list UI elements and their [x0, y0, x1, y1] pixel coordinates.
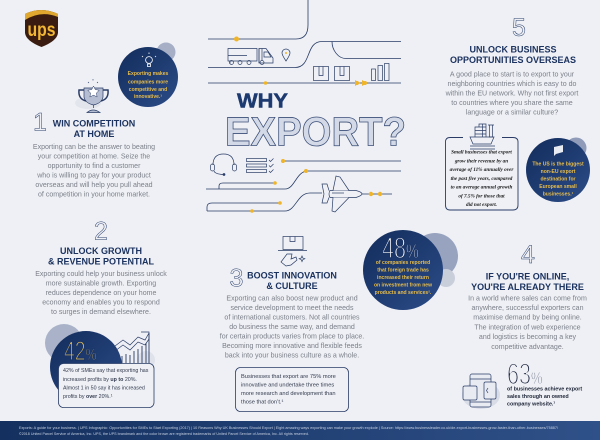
section 2: unlock growth and revenue potential: to surges in demand elsewhere.	[51, 309, 151, 316]
text box	[58, 364, 154, 408]
section 2: unlock growth and revenue potential: 2	[94, 218, 108, 246]
icon: devices	[462, 374, 500, 409]
section 3: boost innovation and culture: 3	[230, 264, 243, 292]
callout circle: competitive and innovative: companies more	[128, 80, 168, 86]
icon: truck	[228, 48, 273, 64]
footer	[0, 421, 600, 440]
icon: boxes	[314, 66, 350, 80]
section 5: unlock business opportunities overseas: to countries where you share the same	[451, 100, 573, 107]
icon: checklist	[246, 158, 274, 172]
section 3: boost innovation and culture: for certain products varies from place to place.	[220, 334, 364, 340]
section 4: if you're online: YOU'RE ALREADY THERE	[471, 282, 584, 292]
icon: bar chart	[372, 64, 389, 80]
callout box: small businesses growth: did not export.	[466, 202, 497, 208]
footer: Exports: A guide for your business. | UPS Infographic: Opportunities for SMEs to Start Exporting (2017) | 10 Reasons Why UK Businesses Should Export | Eight amazing ways exporting can make your growth explode | Source: https://www.businessleader.co.uk/de-export-businesses-grow-faster-than-other-businesses/75887/	[19, 426, 558, 430]
callout circle: competitive and innovative	[118, 42, 178, 107]
icon: trophy	[75, 79, 108, 112]
icon: flag	[554, 145, 563, 156]
illustration: upper route lines, truck, boxes	[208, 0, 401, 86]
section 1: win competition at home: 1	[33, 108, 47, 136]
callout circle: US biggest destination: The US is the biggest	[532, 162, 584, 168]
icon: container ship	[470, 124, 495, 149]
section 2: unlock growth and revenue potential	[35, 218, 167, 316]
section 4: if you're online: In a world where sales can come from	[468, 296, 587, 302]
logo: UPS shield	[25, 10, 58, 47]
callout circle: US biggest destination: non-EU export	[541, 169, 576, 175]
section 4: if you're online: competitive advantage.	[491, 344, 564, 351]
callout box: small businesses growth: the past five years, compared	[451, 176, 513, 182]
section 5: unlock business opportunities overseas: A good place to start is to export to your	[450, 72, 575, 78]
callout circle: competitive and innovative: innovative.¹	[134, 94, 162, 100]
section 5: unlock business opportunities overseas: UNLOCK BUSINESS	[469, 44, 557, 54]
stat: 48%: 48%	[382, 230, 419, 265]
callout circle: US biggest destination	[526, 138, 590, 202]
callout: 42 percent	[45, 324, 155, 408]
section 4: if you're online: anywhere, successful exporters can	[471, 305, 584, 312]
callout box: small businesses growth: Small businesses that export	[451, 150, 512, 156]
section 3: boost innovation and culture: of international customers. Not all countries	[224, 314, 360, 322]
icon: headset	[210, 154, 236, 176]
callout box: small businesses growth: of 7.5% for those that	[458, 194, 505, 200]
title	[225, 90, 406, 154]
section 2: unlock growth and revenue potential: & REVENUE POTENTIAL	[48, 256, 155, 266]
section 3: boost innovation and culture: do business the same way, and demand	[229, 324, 355, 331]
chart: rising arrows	[115, 332, 149, 363]
callout box: small businesses growth: to an average annual growth	[451, 184, 512, 190]
section 2: unlock growth and revenue potential: UNLOCK GROWTH	[60, 246, 142, 256]
section 3: boost innovation and culture: back into your business culture as a whole.	[225, 352, 359, 360]
section 1: win competition at home: your competition at home. Seize the	[38, 154, 150, 160]
section 5: unlock business opportunities overseas: neighboring countries which is easy to do	[448, 81, 577, 88]
callout circle: 48 percent: on investment from new	[374, 282, 432, 288]
stat: 63 percent	[507, 356, 582, 408]
callout circle: US biggest destination: destination for	[540, 176, 576, 182]
section 3: boost innovation and culture: Exporting can also boost new product and	[226, 296, 358, 302]
section 3: boost innovation and culture	[220, 264, 364, 360]
section 3: boost innovation and culture: service development to meet the needs	[230, 305, 354, 312]
section 1: win competition at home: who is willing to pay for your product	[36, 172, 151, 180]
callout box: 75 percent more innovative: innovative and undertake three times	[241, 382, 334, 388]
stat: 63 percent: company website.¹	[507, 402, 555, 408]
title: EXPORT?	[225, 108, 406, 154]
stat: 63 percent: of businesses achieve export	[507, 386, 582, 392]
callout circle: 48 percent: of companies reported	[376, 260, 430, 266]
callout box: small businesses growth: average of 11% annually over	[450, 167, 514, 173]
section 4: if you're online: maximise demand by being online.	[473, 314, 582, 322]
callout box: 75 percent more innovative	[236, 368, 348, 412]
icon: innovation box in hand	[278, 236, 307, 266]
section 1: win competition at home: opportunity to find a customer	[48, 163, 141, 170]
section 1: win competition at home	[33, 108, 155, 198]
section 3: boost innovation and culture: Becoming more innovative and flexible feeds	[222, 343, 362, 350]
section 4: if you're online: and logistics is becoming a key	[479, 334, 577, 341]
section 2: unlock growth and revenue potential: more sustainable growth. Exporting	[46, 280, 156, 288]
logo: UPS shield: ups	[28, 20, 56, 41]
section 5: unlock business opportunities overseas	[445, 14, 578, 116]
stat: 63 percent: sales through an owned	[507, 394, 569, 400]
callout circle: US biggest destination: businesses.¹	[543, 192, 574, 198]
section 4: if you're online: The integration of web experience	[474, 324, 581, 332]
section 5: unlock business opportunities overseas: within the EU network. Why not first export	[445, 90, 578, 98]
section 1: win competition at home: WIN COMPETITION	[53, 118, 135, 128]
callout circle: 48 percent: products and services².	[375, 290, 432, 296]
callout circle: competitive and innovative: Exporting makes	[128, 71, 169, 77]
callout circle: 48 percent: that foreign trade has	[377, 268, 429, 274]
callout circle: competitive and innovative: competitive and	[129, 87, 167, 93]
callout box: 75 percent more innovative: those that don’t.¹	[241, 400, 283, 406]
section 5: unlock business opportunities overseas: language or a similar culture?	[466, 110, 558, 116]
stat: 42%: 42%	[64, 336, 97, 366]
section 2: unlock growth and revenue potential: economy and enables you to respond	[42, 300, 160, 306]
callout: 42 percent: increased profits by up to 20%.	[63, 377, 137, 383]
section 3: boost innovation and culture: BOOST INNOVATION	[247, 270, 337, 280]
section 1: win competition at home: Exporting can be the answer to beating	[33, 144, 155, 151]
callout circle: 48 percent	[363, 230, 458, 310]
illustration: lower route lines, headset, plane	[206, 154, 401, 213]
icon: airplane	[322, 176, 362, 212]
section 3: boost innovation and culture: & CULTURE	[266, 281, 318, 291]
footer: ©2018 United Parcel Service of America, Inc. UPS, the UPS brandmark and the color brown are registered trademarks of United Parcel Service of America, Inc. All rights reserved.	[19, 432, 309, 436]
callout box: 75 percent more innovative: more research and development than	[241, 391, 336, 397]
icon: light bulb	[142, 52, 156, 66]
section 2: unlock growth and revenue potential: reduces dependence on your home	[46, 290, 157, 297]
stat: 63 percent: 63%	[507, 356, 543, 391]
section 1: win competition at home: overseas and will help you pull ahead	[35, 182, 153, 189]
icon: location pin	[282, 49, 290, 61]
callout: 42 percent: 42% of SMEs say that exporting has	[63, 368, 149, 374]
section 1: win competition at home: of competition in your home market.	[38, 192, 150, 198]
section 4: if you're online	[468, 241, 587, 351]
section 1: win competition at home: AT HOME	[74, 129, 114, 139]
section 4: if you're online: IF YOU'RE ONLINE,	[486, 272, 569, 282]
callout circle: 48 percent: increased their return	[377, 275, 429, 281]
callout box: 75 percent more innovative: Businesses that export are 75% more	[241, 374, 336, 380]
callout box: small businesses growth: grow their revenue by an	[454, 158, 508, 164]
callout: 42 percent: profits by over 20%.¹	[63, 394, 113, 400]
callout: 42 percent: Almost 1 in 50 say it has increased	[63, 386, 145, 392]
title: WHY	[237, 90, 288, 112]
section 4: if you're online: 4	[521, 241, 535, 269]
section 2: unlock growth and revenue potential: Exporting could help your business unlock	[35, 271, 167, 278]
section 5: unlock business opportunities overseas: 5	[512, 14, 526, 42]
section 5: unlock business opportunities overseas: OPPORTUNITIES OVERSEAS	[450, 55, 576, 65]
callout circle: US biggest destination: European small	[539, 184, 577, 190]
callout box: small businesses growth	[446, 138, 518, 210]
